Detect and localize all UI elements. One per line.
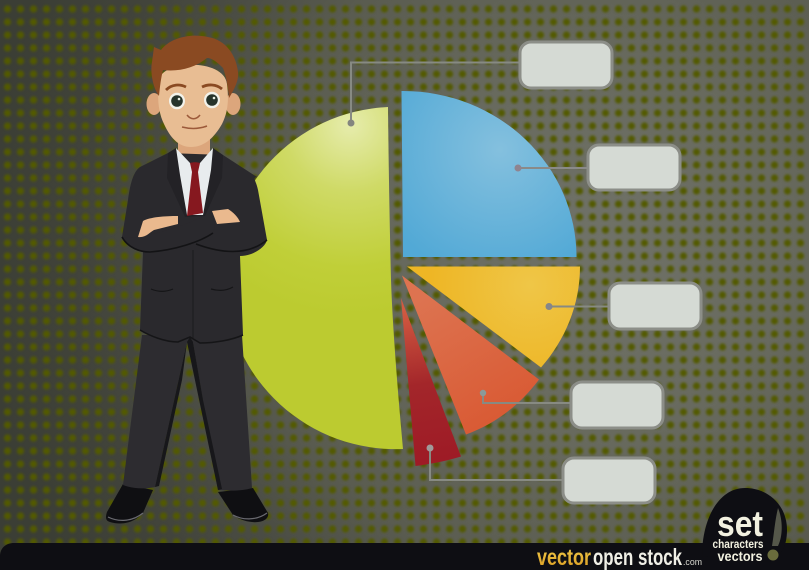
box 4 [571, 382, 663, 428]
box 1 [520, 42, 612, 88]
bottom bar [0, 543, 809, 570]
businessman [106, 36, 268, 523]
brand text: open stock [593, 544, 682, 570]
connector: orange to box 4 [480, 390, 571, 403]
brand text: vector [537, 544, 591, 570]
neck [178, 135, 210, 160]
trousers [123, 335, 252, 491]
shoes [106, 484, 268, 523]
label boxes [520, 42, 701, 503]
box 2 [588, 145, 680, 190]
callout connectors [348, 62, 609, 480]
hair [151, 36, 238, 98]
badge: set characters vectors [702, 488, 787, 564]
brand text: .com [683, 557, 702, 567]
slice: orange [402, 276, 539, 434]
connector: blue to box 2 [514, 164, 588, 172]
shirt and collar [176, 148, 213, 215]
nose and mouth [182, 115, 207, 128]
slice: green [224, 107, 403, 449]
box 5 [563, 458, 655, 503]
badge: set characters vectors: vectors [718, 548, 763, 564]
jacket [122, 148, 267, 343]
connector: yellow to box 3 [546, 303, 609, 310]
face [158, 65, 228, 147]
hands [138, 209, 240, 237]
connector: green to box 1 [348, 62, 520, 126]
slice: blue [402, 91, 576, 257]
eyebrows [166, 85, 222, 90]
eyes [169, 92, 220, 109]
badge: set characters vectors: characters [712, 537, 764, 551]
tie [187, 162, 203, 216]
brand text [537, 544, 702, 570]
badge text: set [717, 503, 763, 544]
slice: dark red [401, 298, 461, 466]
pie chart [224, 91, 580, 466]
connector: red to box 5 [426, 444, 563, 480]
box 3 [609, 283, 701, 329]
exclamation mark [768, 508, 782, 560]
slice: yellow [407, 266, 580, 368]
ears [146, 93, 240, 115]
